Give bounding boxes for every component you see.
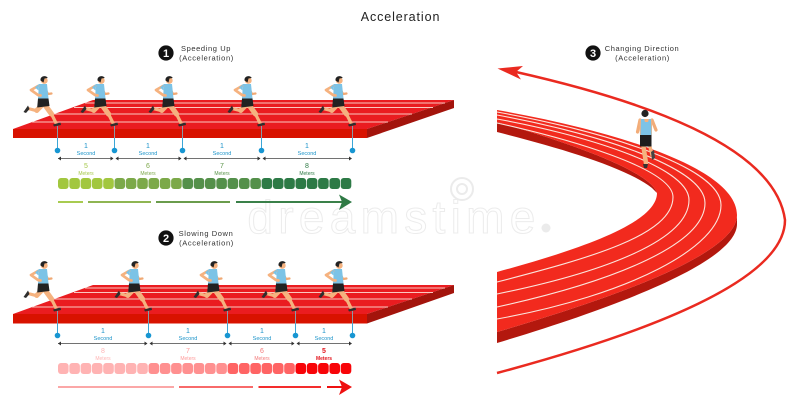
heading: speeding up: 1 [163, 48, 169, 60]
track: speeding up [13, 100, 454, 138]
distance labels: slowing down: Meters [95, 356, 111, 362]
time labels: slowing down: Second [179, 336, 197, 342]
heading: slowing down: Slowing Down [179, 229, 233, 238]
time labels: slowing down: 1 [186, 328, 190, 335]
speed arrow: slowing down [58, 380, 352, 395]
distance labels: speeding up: 6 [146, 163, 150, 170]
heading: slowing down: (Acceleration) [179, 238, 234, 248]
time labels: speeding up: Second [139, 151, 157, 157]
heading: changing direction [585, 44, 679, 62]
time labels: speeding up [77, 143, 316, 157]
curved direction arrow [497, 66, 785, 373]
runners: slowing down [24, 261, 356, 312]
track outer side wall [497, 215, 737, 343]
time labels: speeding up: 1 [220, 143, 224, 150]
time labels: slowing down: 1 [260, 328, 264, 335]
title: Acceleration [361, 10, 440, 24]
distance blocks: slowing down [58, 363, 351, 374]
time labels: slowing down: Second [315, 336, 333, 342]
distance labels: slowing down: Meters [180, 356, 196, 362]
time labels: speeding up: 1 [146, 143, 150, 150]
distance labels: speeding up: Meters [78, 171, 94, 177]
distance labels: slowing down: 7 [186, 348, 190, 355]
heading: changing direction: (Acceleration) [615, 54, 670, 62]
time labels: slowing down [94, 328, 333, 342]
distance labels: speeding up: 7 [220, 163, 224, 170]
time labels: speeding up: Second [77, 151, 95, 157]
time labels: speeding up: 1 [305, 143, 309, 150]
distance labels: slowing down [95, 348, 332, 362]
heading: changing direction: 3 [590, 48, 596, 60]
track surface [497, 110, 737, 332]
distance labels: slowing down: Meters [316, 356, 332, 362]
track: slowing down [13, 285, 454, 324]
distance labels: speeding up: 8 [305, 163, 309, 170]
distance labels: slowing down: 6 [260, 348, 264, 355]
distance labels: speeding up: Meters [214, 171, 230, 177]
interval arrows: slowing down [58, 342, 352, 346]
curved track [497, 110, 737, 343]
speed arrow: speeding up [58, 194, 352, 210]
heading: speeding up: Speeding Up [181, 44, 231, 53]
interval arrows: speeding up [58, 156, 352, 160]
distance blocks: speeding up [58, 178, 351, 189]
track inner side wall [497, 122, 657, 193]
distance labels: speeding up: 5 [84, 163, 88, 170]
distance labels: slowing down: 8 [101, 348, 105, 355]
time labels: slowing down: 1 [101, 328, 105, 335]
heading: slowing down [158, 229, 234, 248]
watermark: dreamstime [247, 191, 541, 243]
distance labels: slowing down: 5 [322, 348, 326, 355]
distance labels: speeding up: Meters [299, 171, 315, 177]
lane lines [497, 112, 721, 319]
time labels: speeding up: Second [298, 151, 316, 157]
time labels: slowing down: Second [253, 336, 271, 342]
heading: changing direction: Changing Direction [605, 44, 679, 53]
heading: slowing down: 2 [163, 233, 169, 245]
time labels: speeding up: 1 [84, 143, 88, 150]
runners: speeding up [24, 76, 356, 126]
heading: speeding up: (Acceleration) [179, 54, 234, 62]
distance labels: speeding up [78, 163, 315, 177]
heading: speeding up [158, 44, 234, 62]
time labels: slowing down: 1 [322, 328, 326, 335]
time labels: slowing down: Second [94, 336, 112, 342]
time markers: slowing down [55, 311, 355, 338]
distance labels: speeding up: Meters [140, 171, 156, 177]
runner from behind [638, 110, 656, 168]
distance labels: slowing down: Meters [254, 356, 270, 362]
time labels: speeding up: Second [213, 151, 231, 157]
time markers: speeding up [55, 126, 355, 153]
